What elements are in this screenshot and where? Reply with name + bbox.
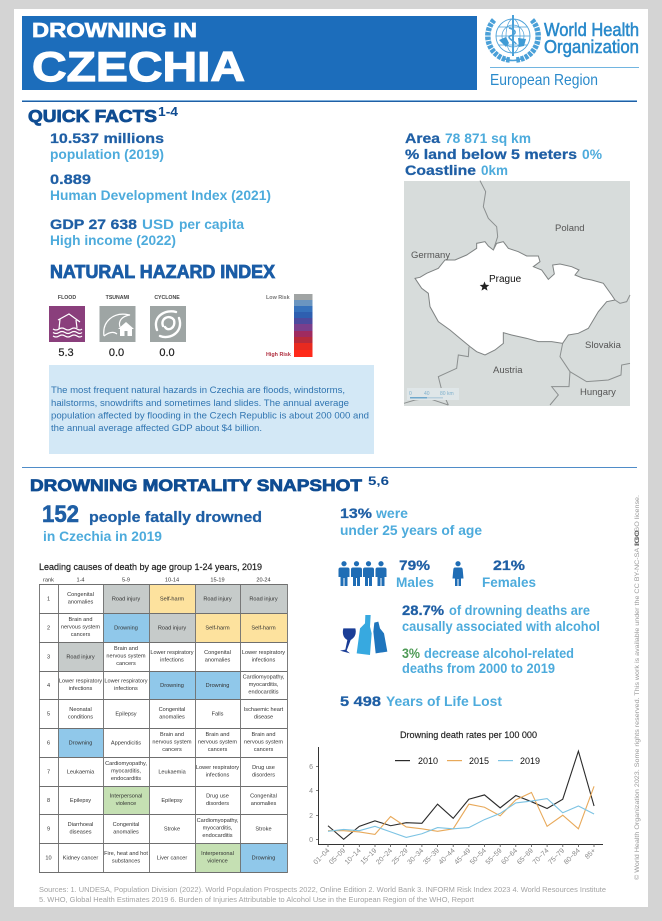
copyright note: © World Health Organization 2023. Some rights reserved. This work is available under the CC BY-NC-SA 3.0 IGO license. [633, 495, 641, 880]
row 2: 2 [47, 626, 50, 632]
icon: flood: FLOOD [58, 295, 76, 301]
risk legend: High Risk [266, 352, 291, 358]
organisation name: Organization [544, 36, 639, 57]
row 4: Drowning [206, 683, 229, 689]
icon: WHO emblem [488, 15, 538, 60]
stat: alcohol decrease: deaths from 2000 to 2019 [402, 660, 555, 676]
map labels: Prague [489, 274, 522, 285]
row 3: Lower respiratory [150, 650, 194, 656]
row 4: 4 [47, 683, 50, 689]
row 4: infections [69, 686, 93, 692]
row 6: cancers [162, 747, 182, 753]
x axis labels: 35−39 [422, 847, 441, 866]
row 3: Lower respiratory [242, 650, 285, 656]
x axis labels: 55−59 [485, 847, 504, 866]
chart title: Drowning death rates per 100 000 [400, 730, 537, 740]
row 8: anomalies [251, 801, 276, 807]
row 8: disorders [206, 801, 229, 807]
x axis labels: 60−64 [500, 847, 519, 866]
row 5: conditions [68, 714, 93, 720]
x axis labels: 85+ [584, 847, 597, 861]
icon: tsunami: 0.0 [109, 347, 124, 359]
callout: natural hazards: population affected by flooding in the Czech Republic is about 200 000 and [51, 410, 369, 420]
map labels: Hungary [580, 387, 616, 398]
stat: females [482, 557, 536, 590]
map labels: Germany [411, 250, 450, 261]
region name: European Region [490, 72, 598, 89]
quick facts list: Human Development Index (2021) [50, 187, 271, 203]
map scale bar [407, 388, 459, 400]
icon: female figure [452, 561, 464, 586]
heading: quick facts: 1-4 [158, 104, 179, 119]
row 5: Falls [212, 712, 224, 718]
map labels: Poland [555, 223, 585, 234]
map scale bar: 0 [409, 391, 412, 397]
series 2010 [328, 751, 594, 839]
row 1: Road injury [203, 596, 232, 602]
stat: alcohol association: causally associated with alcohol [402, 618, 600, 634]
table header: 5-9 [122, 578, 130, 584]
row 9: Congenital [113, 822, 139, 828]
icon: capital star [480, 282, 489, 291]
heading: drowning mortality snapshot: DROWNING MORTALITY SNAPSHOT [30, 476, 363, 495]
row 3: Congenital [204, 650, 231, 656]
x axis labels: 50−54 [469, 847, 488, 866]
geography facts [405, 130, 603, 178]
quick facts list: 0.889 [50, 171, 91, 187]
header banner [22, 16, 477, 90]
row 9: Diarrhoeal [68, 822, 93, 828]
stat: fatal drownings [42, 501, 262, 544]
row 4: Lower respiratory [59, 678, 102, 684]
row 3: infections [160, 658, 184, 664]
row 6: Brain and [252, 732, 275, 738]
stat: females: 21% [493, 557, 526, 573]
row 5 [47, 707, 284, 720]
row 9: diseases [69, 830, 92, 836]
row 9: Stroke [164, 826, 180, 832]
row 8: Interpersonal [110, 794, 142, 800]
risk legend: Low Risk [266, 295, 290, 301]
row 3: anomalies [205, 658, 230, 664]
row 6: Appendicitis [111, 740, 141, 746]
callout: natural hazards: the annual average affected GDP about $4 billion. [51, 422, 262, 433]
row 1: Road injury [249, 596, 278, 602]
row 10: Drowning [252, 856, 275, 862]
row 7: Leukaemia [158, 770, 187, 776]
chart legend: 2015 [469, 756, 489, 766]
row 2: Self-harm [251, 626, 276, 632]
stat: under 25: under 25 years of age [340, 522, 482, 538]
y axis labels: 2 [309, 813, 313, 820]
stat: alcohol association: 28.7% [402, 602, 445, 618]
stat: years of life lost: Years of Life Lost [386, 693, 502, 709]
row 10: substances [112, 858, 140, 864]
quick facts list: USD [142, 216, 174, 232]
stat: fatal drownings: people fatally drowned [89, 510, 262, 526]
row 4: Cardiomyopathy, [243, 674, 285, 680]
country shape [415, 242, 615, 355]
map labels [411, 223, 622, 398]
x axis labels [313, 847, 597, 866]
row 3: nervous system [106, 654, 146, 660]
y axis labels [309, 764, 313, 844]
stat: alcohol decrease: 3% [402, 645, 420, 661]
quick facts list: 10.537 millions [50, 130, 164, 146]
row 5: disease [254, 714, 273, 720]
heading: natural hazard index: NATURAL HAZARD INDEX [50, 262, 275, 282]
organisation name [544, 19, 639, 57]
row 2: Road injury [158, 626, 186, 632]
row 6: cancers [208, 747, 227, 753]
row 7: disorders [252, 772, 275, 778]
icon: tsunami: TSUNAMI [106, 295, 130, 301]
row 7: Cardiomyopathy, [105, 761, 147, 767]
row 5: Epilepsy [115, 712, 137, 718]
y axis labels: 0 [309, 837, 313, 844]
x axis labels: 15−19 [360, 847, 378, 866]
chart legend [395, 756, 540, 766]
icon: four male figures [338, 561, 386, 586]
row 4: Drowning [160, 683, 184, 689]
callout: natural hazards [49, 365, 374, 454]
stat: alcohol association: of drowning deaths are [449, 602, 590, 618]
organisation name: World Health [544, 19, 639, 40]
geography facts: 78 871 sq km [445, 130, 531, 146]
row 6: cancers [254, 747, 273, 753]
WHO logo [488, 15, 639, 89]
table header: 1-4 [76, 578, 85, 584]
x axis labels: 80−84 [563, 847, 582, 866]
row 4: Lower respiratory [104, 678, 148, 684]
row 3: cancers [116, 661, 136, 667]
stat: under 25 [340, 505, 482, 538]
row 8: Epilepsy [161, 798, 183, 804]
geography facts: 0km [481, 162, 508, 178]
row 5: Ischaemic heart [244, 707, 284, 713]
row 9: Cardiomyopathy, [197, 818, 239, 824]
row 8: Epilepsy [70, 798, 91, 804]
row 8: Drug use [206, 794, 229, 800]
map labels: Austria [493, 365, 523, 376]
icon: tsunami [100, 295, 136, 359]
table header: rank [43, 578, 54, 584]
copyright note: IGO [634, 530, 641, 546]
title: country name: CZECHIA [32, 43, 245, 90]
row 10: Kidney cancer [63, 856, 98, 862]
x axis labels: 25−29 [391, 847, 410, 866]
heading: quick facts: QUICK FACTS [28, 106, 157, 126]
stat: females: Females [482, 574, 536, 590]
table title: Leading causes of death by age group 1-24 years, 2019 [39, 562, 262, 572]
x axis labels: 30−34 [406, 847, 425, 866]
row 8: 8 [47, 798, 50, 804]
series 2019 [328, 799, 594, 837]
row 8 [47, 786, 277, 814]
row 2: cancers [71, 632, 90, 638]
row 10: violence [207, 858, 228, 864]
row 3 [47, 642, 285, 671]
chart legend: 2019 [520, 756, 540, 766]
row 9: myocarditis, [203, 826, 233, 832]
title: drowning in: DROWNING IN [32, 20, 197, 42]
row 2: Drowning [114, 626, 138, 632]
row 1: Congenital [67, 592, 94, 598]
x axis labels: 40−44 [438, 847, 457, 866]
icon: glass and bottles [340, 615, 387, 655]
stat: fatal drownings: 152 [42, 501, 79, 528]
row 5: anomalies [159, 714, 185, 720]
stat: under 25: were [375, 505, 408, 521]
row 6: nervous system [152, 740, 192, 746]
x axis labels: 01−04 [313, 847, 331, 866]
stat: years of life lost: 5 498 [340, 693, 381, 709]
quick facts list: population (2019) [50, 146, 164, 162]
x axis labels: 65−69 [516, 847, 535, 866]
row 9: endocarditis [202, 833, 233, 839]
row 6 [47, 728, 283, 757]
x axis labels: 75−79 [547, 847, 566, 866]
stat: males: Males [396, 574, 434, 590]
x axis labels: 45−49 [453, 847, 472, 866]
row 1: Road injury [112, 596, 140, 602]
row 5: Congenital [159, 707, 185, 713]
row 6: 6 [47, 740, 50, 746]
row 7 [47, 761, 275, 782]
map scale bar: 40 [424, 391, 430, 397]
row 7: Drug use [252, 765, 275, 771]
row 6: Brain and [160, 732, 184, 738]
row 7: infections [206, 772, 230, 778]
row 3: Road injury [66, 654, 95, 660]
icon: cyclone: 0.0 [159, 347, 175, 359]
callout: natural hazards: hailstorms, snowdrifts and sometimes land slides. The annual average [51, 397, 349, 408]
row 3: Brain and [114, 646, 138, 652]
chart legend: 2010 [418, 756, 438, 766]
table: leading causes of death [39, 562, 288, 873]
map labels: Slovakia [585, 340, 622, 351]
row 2: Brain and [69, 617, 92, 623]
line chart: drowning death rates [309, 730, 603, 866]
icon: flood: 5.3 [58, 347, 74, 359]
row 10 [45, 843, 287, 872]
x axis labels: 05−09 [328, 847, 347, 866]
row 1: Self-harm [160, 596, 184, 602]
y axis labels: 4 [309, 788, 313, 795]
row 6: Brain and [206, 732, 229, 738]
heading: drowning mortality snapshot: 5,6 [368, 474, 389, 488]
row 6: nervous system [244, 740, 283, 746]
stat: alcohol association [402, 602, 600, 634]
x axis labels: 70−74 [532, 847, 551, 866]
geography facts: Coastline [405, 162, 476, 178]
row 5: 5 [47, 712, 50, 718]
row 6: Drowning [69, 740, 92, 746]
row 2: nervous system [61, 624, 100, 630]
icon: cyclone [150, 295, 186, 359]
row 10: Interpersonal [201, 851, 234, 857]
table header: 10-14 [165, 578, 179, 584]
row 3: 3 [47, 654, 50, 660]
geography facts: % land below 5 meters [405, 146, 577, 162]
row 2 [47, 613, 287, 642]
row 1: anomalies [68, 600, 93, 606]
row 4 [47, 671, 285, 699]
row 5: Neonatal [69, 707, 92, 713]
row 7: 7 [47, 770, 50, 776]
table header: 20-24 [256, 578, 271, 584]
table header [43, 578, 271, 584]
row 7: Lower respiratory [196, 765, 239, 771]
row 7: myocarditis, [111, 768, 141, 774]
stat: alcohol decrease: decrease alcohol-related [424, 645, 574, 661]
row 8: Congenital [250, 794, 277, 800]
stat: fatal drownings: in Czechia in 2019 [43, 529, 162, 544]
map of Czechia [404, 181, 630, 406]
quick facts list: GDP 27 638 [50, 216, 137, 232]
x axis labels: 20−24 [375, 847, 394, 866]
row 1 [47, 584, 287, 613]
stat: under 25: 13% [340, 505, 373, 521]
row 7: Leukaemia [67, 770, 95, 776]
row 9: anomalies [113, 830, 139, 836]
stat: males [396, 557, 434, 590]
row 10: 10 [45, 856, 52, 862]
row 8: violence [116, 801, 136, 807]
sources: Sources: 1. UNDESA, Population Division (2022). World Population Prospects 2022, Online Edition 2. World Bank 3. INFORM Risk Index 2023 4. World Resources Institute [39, 885, 606, 894]
quick facts list: High income (2022) [50, 232, 176, 248]
risk legend [266, 294, 312, 358]
map scale bar: 80 km [440, 391, 454, 397]
geography facts: Area [405, 130, 440, 146]
row 10: Liver cancer [157, 856, 187, 862]
sources [39, 885, 606, 904]
y axis labels: 6 [309, 764, 313, 771]
row 9: 9 [47, 826, 50, 832]
stat: alcohol decrease [402, 645, 574, 676]
row 1: 1 [47, 596, 50, 602]
row 4: myocarditis, [249, 682, 279, 688]
hazard icons [49, 295, 186, 359]
icon: cyclone: CYCLONE [154, 295, 180, 301]
row 9 [47, 818, 272, 839]
quick facts list: per capita [179, 216, 244, 232]
quick facts list [50, 130, 271, 248]
row 7: endocarditis [111, 776, 141, 782]
row 4: endocarditis [248, 690, 279, 696]
row 10: Fire, heat and hot [104, 851, 148, 857]
icon: flood [49, 295, 85, 359]
geography facts: 0% [582, 146, 603, 162]
series 2015 [328, 786, 594, 834]
table header: 15-19 [210, 578, 225, 584]
row 9: Stroke [255, 826, 272, 832]
callout: natural hazards: The most frequent natural hazards in Czechia are floods, windstorms, [51, 384, 345, 395]
sources: 5. WHO, Global Health Estimates 2019 6. Burden of Injuries Attributable to Alcohol Use in the European Region of the WHO, Report [39, 895, 475, 904]
stat: males: 79% [399, 557, 431, 573]
row 2: Self-harm [205, 626, 230, 632]
row 6: nervous system [198, 740, 237, 746]
colour scale [294, 294, 312, 357]
row 3: infections [252, 658, 276, 664]
row 4: infections [114, 686, 138, 692]
x axis labels: 10−14 [344, 847, 363, 866]
